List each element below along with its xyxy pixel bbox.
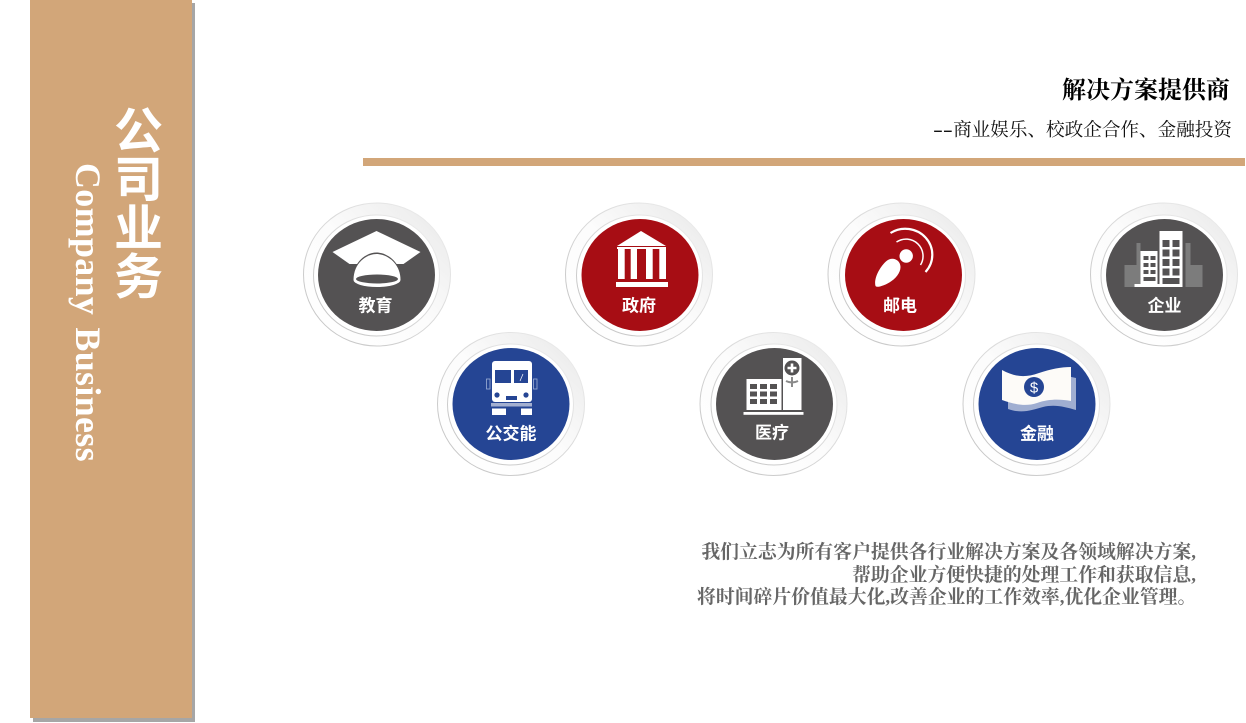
label: 金融 [1020,424,1054,444]
label: 医疗 [755,422,789,442]
subheading: 商业娱乐、校政企合作、金融投资 [953,120,1232,141]
label: 政府 [622,296,656,316]
panel: sidebar [30,0,195,722]
label: 邮电 [883,296,917,316]
sidebar fill [30,0,192,718]
header rule [363,158,1245,166]
heading: 解决方案提供商 [1062,78,1230,104]
subheading: -- [933,120,953,141]
icon: government building [616,231,668,287]
sidebar shadow [33,3,195,722]
label: 公交能 [486,424,536,444]
label: 企业 [1148,296,1182,316]
description line 3: 将时间碎片价值最大化,改善企业的工作效率,优化企业管理。 [697,587,1196,608]
badge: enterprise [1090,203,1238,346]
icon: banknote: $ [1030,380,1039,396]
sidebar subtitle: Company Business [68,163,108,462]
badge: public transport [438,332,584,476]
icon: banknote [1002,367,1076,411]
badge: finance [963,332,1110,476]
description text [697,542,1196,608]
icon: hospital [744,358,804,415]
icon: signal [875,229,932,287]
badge: education [304,203,450,346]
sidebar title: 公司业务 [107,105,161,299]
badge: healthcare [700,332,847,476]
description line 1: 我们立志为所有客户提供各行业解决方案及各领域解决方案, [701,542,1196,563]
description line 2: 帮助企业方便快捷的处理工作和获取信息, [852,564,1196,586]
icon: office towers [1124,231,1202,287]
icon: graduation cap [332,231,420,287]
label: 教育 [358,296,392,316]
badge: government [566,203,712,346]
icon: bus [486,361,537,415]
badge: post and telecom [828,203,975,346]
